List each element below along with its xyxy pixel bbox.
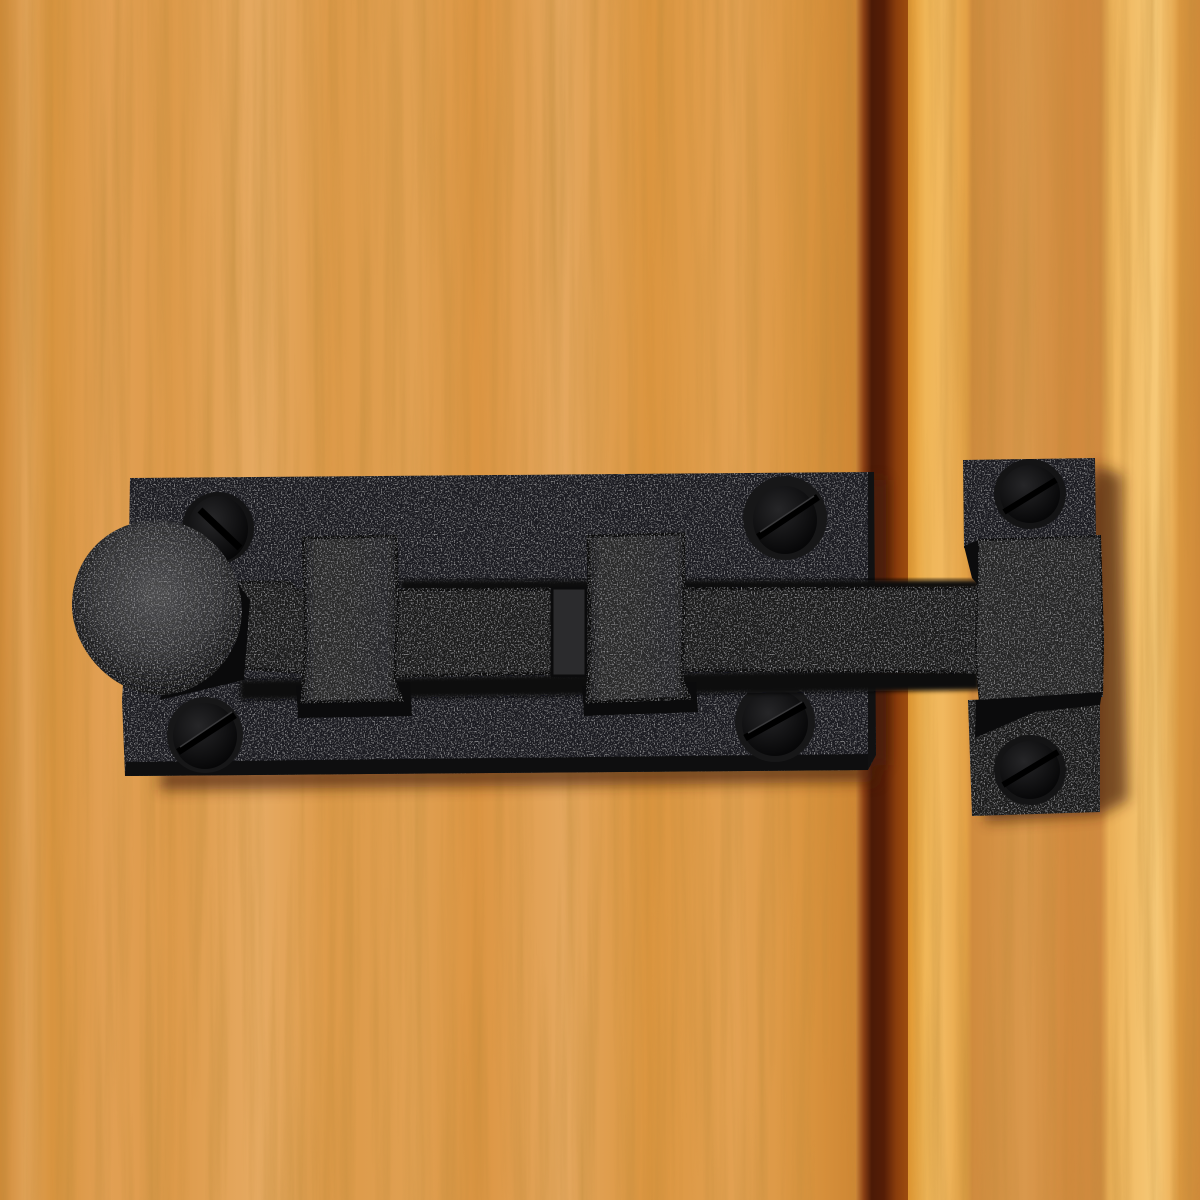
keeper side notch: [964, 540, 978, 585]
shadows cast by latch: [160, 465, 1128, 822]
latch: bolt assembly: [122, 472, 982, 776]
plate screw: top left: [182, 492, 254, 564]
wood: dark gap between door and frame: [856, 0, 912, 1200]
bolt shadow on plate: [240, 580, 980, 700]
wood: door panel: [0, 0, 866, 1200]
keeper screw: bottom: [994, 735, 1066, 805]
left staple: [296, 536, 412, 718]
sliding bolt bar: [240, 582, 982, 676]
latch: round knob: [72, 520, 250, 700]
latch: keeper on frame: [963, 458, 1103, 816]
right staple: [582, 534, 698, 716]
keeper block lower shadow: [975, 692, 1102, 738]
plate screw: bottom left: [167, 697, 243, 773]
plate screw: top right: [743, 476, 827, 560]
keeper block: [976, 536, 1103, 702]
plate screw: bottom right: [735, 682, 815, 762]
keeper bottom plate: [968, 695, 1100, 816]
keeper screw: top: [994, 459, 1066, 529]
back plate: [122, 472, 876, 776]
bolt collar: [552, 588, 586, 676]
wood: door frame: [908, 0, 1200, 1200]
keeper top plate: [963, 458, 1096, 548]
